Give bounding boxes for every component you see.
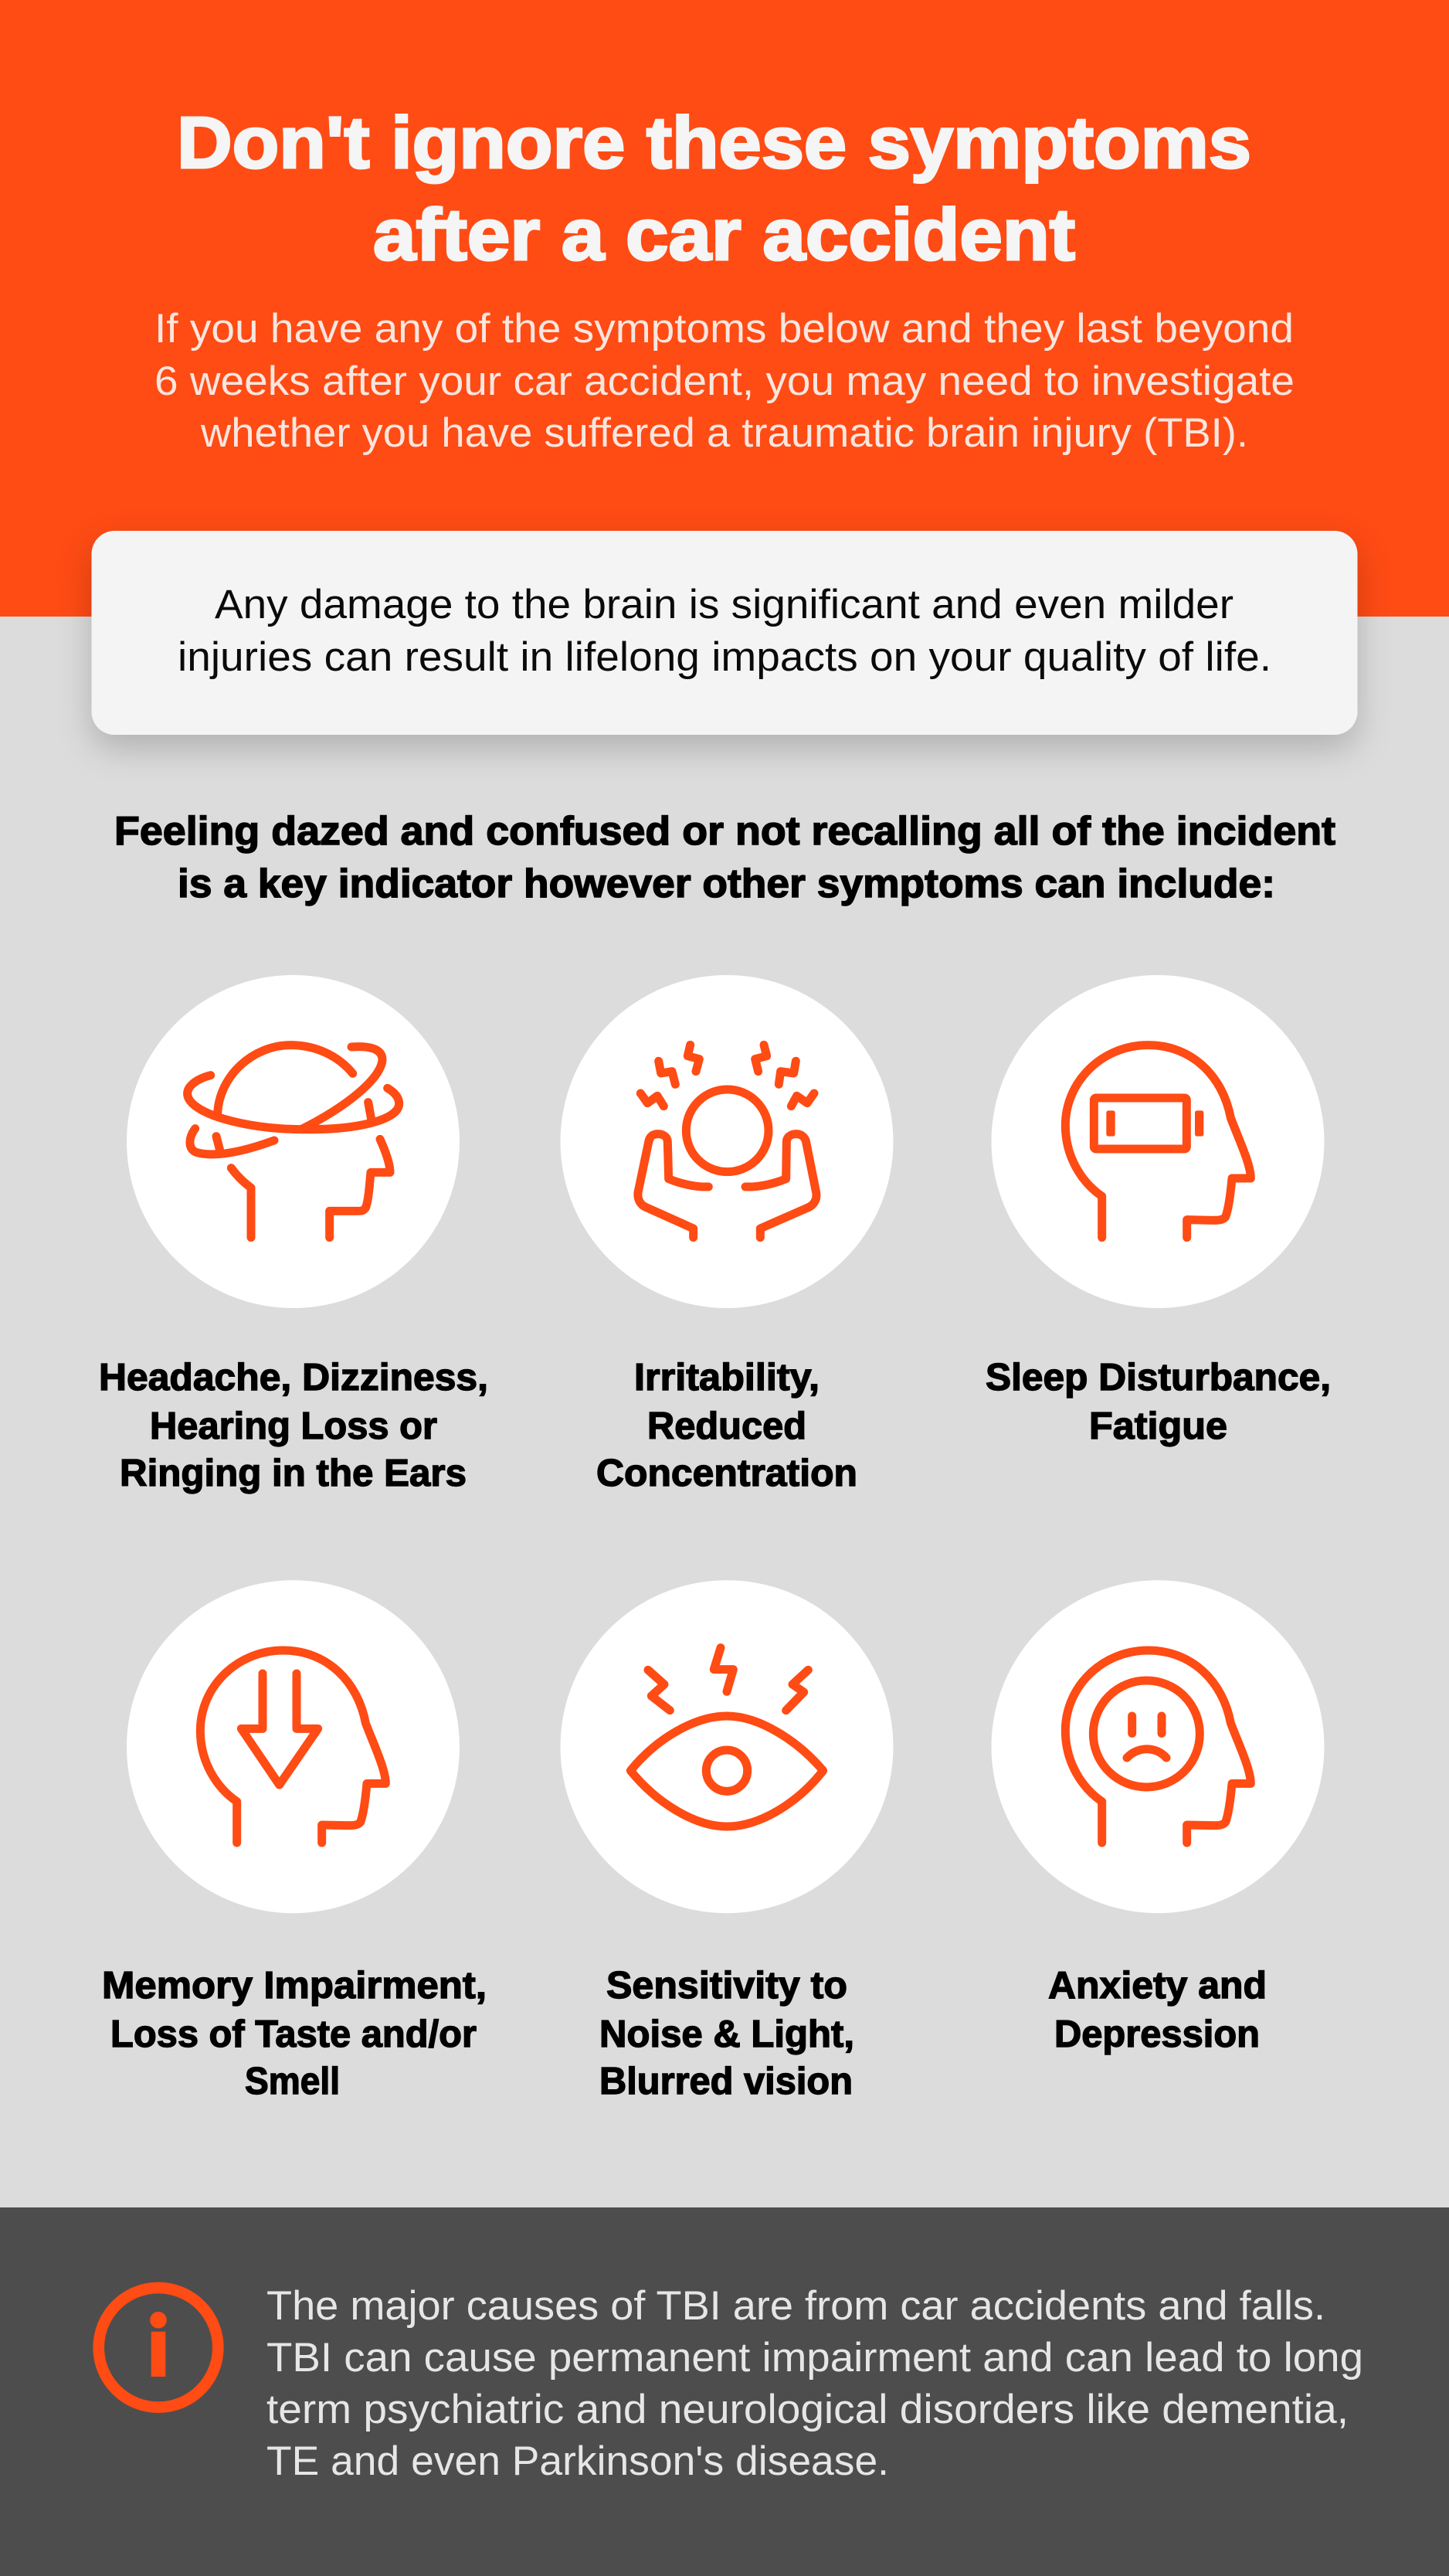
callout card	[91, 531, 1358, 735]
label	[102, 1965, 487, 2102]
label: Irritability,	[634, 1357, 820, 1398]
panel: orange header	[0, 0, 1449, 617]
label	[986, 1357, 1331, 1447]
symptom: sensitivity	[561, 1580, 893, 2102]
icon: head with low battery	[1065, 1045, 1250, 1238]
icon: hands around head	[638, 1045, 816, 1238]
symptom: sleep	[986, 975, 1331, 1447]
intro text: 6 weeks after your car accident, you may need to investigate	[154, 359, 1295, 404]
label	[99, 1357, 488, 1494]
footer text: term psychiatric and neurological disorders like dementia,	[266, 2387, 1349, 2432]
label: Memory Impairment,	[102, 1965, 487, 2007]
section heading: is a key indicator however other symptoms can include:	[178, 861, 1275, 906]
intro text	[154, 306, 1295, 456]
label: Depression	[1054, 2014, 1260, 2055]
icon circle	[127, 975, 460, 1308]
label: Noise & Light,	[599, 2014, 854, 2055]
card text	[178, 582, 1271, 680]
icon circle	[127, 1580, 460, 1913]
intro text: whether you have suffered a traumatic brain injury (TBI).	[200, 410, 1248, 456]
label: Ringing in the Ears	[120, 1453, 467, 1494]
card background	[91, 531, 1358, 735]
icon: head with down arrow	[200, 1650, 385, 1843]
intro text: If you have any of the symptoms below and they last beyond	[154, 306, 1294, 352]
icon: info	[99, 2288, 218, 2408]
card text: injuries can result in lifelong impacts on your quality of life.	[178, 634, 1271, 680]
icon: dizzy head	[188, 1045, 399, 1238]
label: Anxiety and	[1048, 1965, 1267, 2007]
label: Hearing Loss or	[150, 1405, 437, 1447]
label: Fatigue	[1089, 1405, 1227, 1447]
footer text: TBI can cause permanent impairment and can lead to long	[266, 2335, 1363, 2381]
icon: head with sad face	[1065, 1650, 1250, 1843]
panel: dark footer	[0, 2207, 1449, 2576]
label: Concentration	[596, 1453, 857, 1494]
label	[596, 1357, 857, 1494]
icon circle	[561, 1580, 893, 1913]
icon circle	[992, 1580, 1324, 1913]
footer text	[266, 2283, 1363, 2484]
title	[177, 102, 1251, 276]
symptom: anxiety	[992, 1580, 1324, 2055]
footer text: TE and even Parkinson's disease.	[266, 2438, 889, 2484]
title: after a car accident	[373, 194, 1075, 276]
label	[1048, 1965, 1267, 2055]
symptom: headache	[99, 975, 488, 1494]
symptom: memory	[102, 1580, 487, 2102]
label: Reduced	[647, 1405, 806, 1447]
symptom: irritability	[561, 975, 893, 1494]
section heading: Feeling dazed and confused or not recalling all of the incident	[114, 809, 1335, 854]
icon circle	[992, 975, 1324, 1308]
card text: Any damage to the brain is significant and even milder	[215, 582, 1234, 627]
section heading	[114, 809, 1335, 906]
label	[599, 1965, 854, 2102]
label: Blurred vision	[599, 2061, 853, 2102]
label: Smell	[245, 2061, 340, 2102]
icon circle	[561, 975, 893, 1308]
label: Loss of Taste and/or	[110, 2014, 477, 2055]
label: Sensitivity to	[606, 1965, 847, 2007]
title: Don't ignore these symptoms	[177, 102, 1251, 184]
label: Sleep Disturbance,	[986, 1357, 1331, 1398]
footer text: The major causes of TBI are from car accidents and falls.	[266, 2283, 1325, 2329]
icon: eye with bolts	[630, 1648, 823, 1827]
label: Headache, Dizziness,	[99, 1357, 488, 1398]
